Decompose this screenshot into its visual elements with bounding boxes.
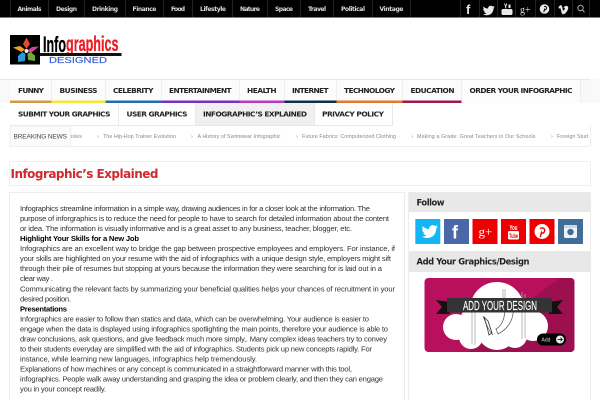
- add your design banner: [424, 278, 574, 352]
- add button: [537, 334, 566, 346]
- heading: presentations: Presentations: [20, 304, 67, 314]
- skills paragraph: [20, 244, 396, 304]
- skills paragraph: Infographics are an excellent way to bridge the gap between prospective employees and employers. For instance, if: [20, 244, 396, 253]
- breaking news ticker: isles: [71, 134, 82, 140]
- top bar: Drinking: [92, 6, 118, 13]
- main navigation: BUSINESS: [60, 86, 98, 95]
- presentations paragraph: draw conclusions, ask questions, and give feedback much more simply,. Many complex ideas teachers try to convey: [20, 334, 387, 344]
- button: facebook: [444, 219, 469, 244]
- main navigation: ORDER YOUR INFOGRAPHIC: [470, 86, 572, 95]
- top bar: Space: [275, 6, 293, 13]
- logo wordmark: [40, 32, 122, 65]
- social icons in top bar: f: [466, 2, 471, 17]
- presentations paragraph: [20, 314, 388, 394]
- social icons in top bar: [466, 2, 584, 17]
- intro paragraph: [20, 204, 390, 233]
- logo mark: black square with coloured star: [10, 35, 40, 64]
- top bar: Nature: [240, 6, 260, 13]
- article text panel: [10, 192, 404, 400]
- top bar: Finance: [132, 6, 156, 13]
- breaking news ticker: [10, 126, 590, 146]
- intro paragraph: Infographics streamline information in a simple way, drawing audiences in for a closer look at the information. The: [20, 204, 370, 213]
- second navigation row: SUBMIT YOUR GRAPHICS: [18, 110, 110, 118]
- page title: [10, 162, 590, 186]
- top bar: Lifestyle: [200, 6, 226, 13]
- presentations paragraph: to their students everyday are simplified with the aid of infographics. Students pick up new concepts rapidly. For: [20, 344, 372, 354]
- follow heading: [409, 192, 590, 212]
- button: instagram: [558, 219, 583, 244]
- main navigation: INTERNET: [292, 86, 328, 95]
- skills paragraph: Communicating the relevant facts by summarizing your beneficial qualities helps your chances of recruitment in your: [20, 284, 395, 293]
- sidebar panel: [408, 192, 590, 400]
- main navigation: HEALTH: [247, 86, 276, 95]
- breaking news ticker: Making a Grade: Great Teachers in Our Schools: [417, 134, 536, 140]
- presentations paragraph: Inforgraphics are easier to follow than statics and data, which can be overwhelming. Your audience is easier to: [20, 314, 369, 324]
- second navigation row: [10, 103, 392, 126]
- top bar: Design: [56, 6, 77, 13]
- ribbon: [436, 298, 563, 314]
- presentations paragraph: instance, while learning new languages, infographics help tremendously.: [20, 354, 257, 364]
- follow heading: Follow: [416, 198, 445, 208]
- main navigation: FUNNY: [18, 86, 45, 95]
- second navigation row: INFOGRAPHIC’S EXPLAINED: [203, 110, 307, 118]
- main navigation: ENTERTAINMENT: [169, 86, 232, 95]
- breaking news ticker: ›: [412, 134, 414, 140]
- intro paragraph: or idea. The information is visually informative and is a great asset to any business, teacher, blogger, etc.: [20, 224, 352, 233]
- breaking news ticker: Future Fabrics: Computerized Clothing: [302, 134, 396, 140]
- breaking news ticker: ›: [191, 134, 193, 140]
- top bar: [0, 0, 600, 18]
- button: twitter: [415, 219, 440, 244]
- social buttons: [415, 219, 583, 244]
- breaking news ticker: ›: [296, 134, 298, 140]
- breaking news ticker: ›: [97, 134, 99, 140]
- top bar: Vintage: [380, 6, 404, 13]
- breaking news ticker: A History of Swimwear Infographic: [198, 134, 281, 140]
- add your graphics heading: Add Your Graphics/Design: [416, 256, 530, 266]
- presentations paragraph: Explanations of how machines or any concept is communicated in a straightforward manner with this tool,: [20, 364, 352, 374]
- button: pinterest: [530, 219, 554, 244]
- door and hammock line art: [472, 289, 525, 345]
- breaking news ticker: Foreign Stud: [557, 134, 588, 140]
- button: youtube: You: [510, 225, 518, 232]
- ribbon: ADD YOUR DESIGN: [463, 299, 537, 313]
- logo: [10, 32, 122, 65]
- heading: highlight your skills: Highlight Your Skills for a New Job: [20, 234, 139, 243]
- breaking news ticker: ›: [551, 134, 553, 140]
- second navigation row: USER GRAPHICS: [126, 110, 188, 118]
- button: youtube: Tube: [509, 233, 518, 240]
- intro paragraph: purpose of inforgraphics is to reduce the need for people to have to search for detailed information about the content: [20, 214, 390, 223]
- skills paragraph: your skills are highlighted on your resume with the aid of infographics with a unique design style, employers might sift: [20, 254, 392, 263]
- button: facebook: f: [452, 222, 459, 242]
- skills paragraph: through their pile of resumes but stopping at yours because the information they were searching for is laid out in a: [20, 264, 383, 273]
- page title: Infographic’s Explained: [10, 167, 158, 181]
- top bar: Food: [171, 6, 185, 13]
- skills paragraph: clear way .: [20, 274, 53, 283]
- top bar: Animals: [18, 6, 42, 13]
- white cloud: [443, 282, 548, 350]
- main navigation: [0, 79, 600, 126]
- breaking news ticker: BREAKING NEWS: [14, 134, 68, 140]
- skills paragraph: desired position.: [20, 294, 71, 304]
- logo wordmark: DESIGNED: [49, 56, 108, 65]
- breaking news ticker: The Hip-Hop Trainer Evolution: [103, 134, 176, 140]
- add your graphics heading: [409, 251, 590, 272]
- presentations paragraph: infographics. People walk away understanding and grasping the idea or problem clearly, and then they can engage: [20, 374, 383, 384]
- main navigation: EDUCATION: [410, 86, 454, 95]
- add button: Add: [542, 338, 551, 344]
- top bar: Political: [341, 6, 365, 13]
- button: google plus: g+: [478, 224, 492, 239]
- main navigation: TECHNOLOGY: [344, 86, 396, 95]
- top bar: Travel: [308, 6, 326, 13]
- button: youtube: [501, 219, 526, 244]
- social icons in top bar: g+: [520, 5, 531, 16]
- main navigation: CELEBRITY: [113, 86, 154, 95]
- second navigation row: PRIVACY POLICY: [322, 110, 385, 118]
- presentations paragraph: engage when the data is displayed using infographics spotlighting the main points, therefore your audience is able to: [20, 324, 388, 334]
- presentations paragraph: you in your concept readily.: [20, 384, 106, 394]
- logo wordmark: graphics: [66, 33, 118, 56]
- logo wordmark: Info: [43, 32, 66, 57]
- button: google plus: [472, 219, 498, 244]
